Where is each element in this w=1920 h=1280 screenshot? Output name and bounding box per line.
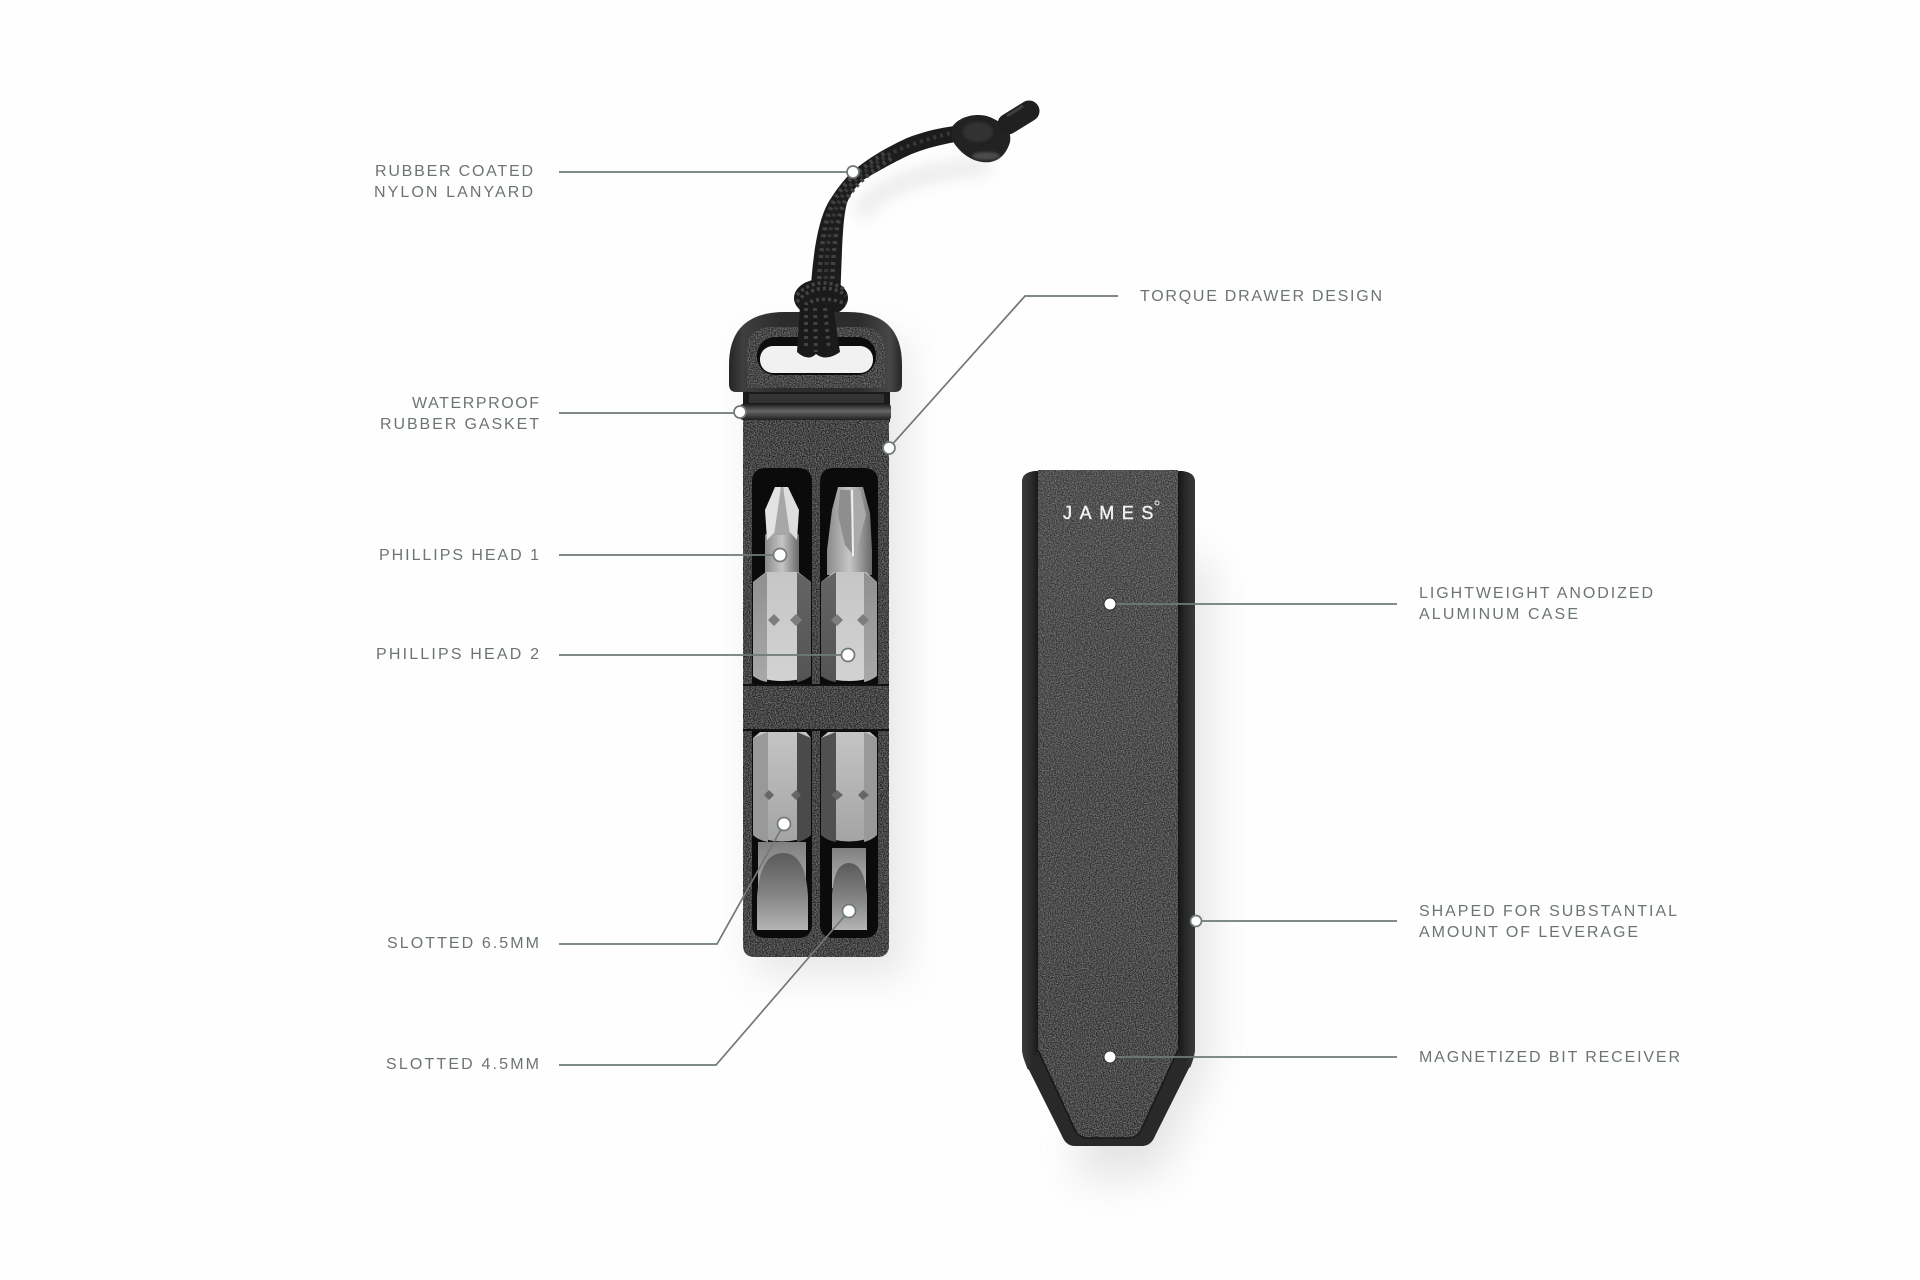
drawer shadow bbox=[755, 340, 905, 975]
callout: lightweight anodized aluminum case: LIGHTWEIGHT ANODIZED bbox=[1419, 585, 1653, 602]
callout: magnetized bit receiver bbox=[1104, 1049, 1680, 1066]
bit: slotted 6.5mm bbox=[753, 732, 811, 930]
callout: waterproof rubber gasket: WATERPROOF bbox=[412, 395, 539, 412]
callout: shaped for substantial amount of leverage bbox=[1190, 903, 1677, 941]
callout: magnetized bit receiver: MAGNETIZED BIT RECEIVER bbox=[1419, 1049, 1680, 1066]
knot bbox=[794, 279, 848, 317]
callout: lightweight anodized aluminum case: ALUMINUM CASE bbox=[1419, 606, 1578, 623]
rubber gasket bbox=[743, 392, 890, 422]
drawer cap bbox=[729, 312, 902, 392]
logo: JAMES: JAMES bbox=[1063, 503, 1161, 523]
bit: slotted 4.5mm bbox=[821, 732, 877, 930]
callout: torque drawer design: TORQUE DRAWER DESIGN bbox=[1140, 288, 1382, 305]
callout: slotted 6.5mm: SLOTTED 6.5MM bbox=[387, 935, 539, 952]
callout: slotted 6.5mm bbox=[387, 818, 790, 952]
callout: phillips head 2 bbox=[376, 646, 854, 663]
bit: phillips head 2 bbox=[821, 487, 877, 682]
callout: phillips head 1: PHILLIPS HEAD 1 bbox=[379, 547, 539, 564]
callout: rubber coated nylon lanyard: NYLON LANYARD bbox=[374, 184, 533, 201]
product: torque drawer bbox=[729, 106, 1029, 975]
callout: torque drawer design bbox=[883, 288, 1382, 454]
callout: slotted 4.5mm bbox=[386, 904, 856, 1073]
case shadow bbox=[1075, 560, 1210, 1180]
lanyard tip bbox=[1008, 111, 1029, 124]
lanyard cord bbox=[794, 106, 1029, 317]
logo degree mark bbox=[1155, 501, 1159, 505]
drawer body bbox=[743, 420, 889, 957]
callout: waterproof rubber gasket bbox=[380, 395, 746, 433]
middle bar bbox=[743, 686, 889, 730]
bead bbox=[952, 115, 1010, 162]
lanyard through slot bbox=[797, 305, 840, 358]
callout: rubber coated nylon lanyard: RUBBER COATED bbox=[375, 163, 533, 180]
callout: lightweight anodized aluminum case bbox=[1104, 585, 1653, 623]
case outer body bbox=[1022, 471, 1195, 1146]
lanyard shadow bbox=[860, 165, 990, 215]
callout: phillips head 1 bbox=[379, 547, 786, 564]
callout: phillips head 2: PHILLIPS HEAD 2 bbox=[376, 646, 539, 663]
bit: phillips head 1 bbox=[753, 487, 811, 682]
callout: shaped for substantial amount of leverage: AMOUNT OF LEVERAGE bbox=[1419, 924, 1638, 941]
callout: rubber coated nylon lanyard bbox=[374, 163, 859, 201]
drawer lower windows bbox=[752, 730, 812, 938]
drawer top windows bbox=[752, 468, 812, 685]
callout: shaped for substantial amount of leverage: SHAPED FOR SUBSTANTIAL bbox=[1419, 903, 1677, 920]
callout: slotted 4.5mm: SLOTTED 4.5MM bbox=[386, 1056, 539, 1073]
product: aluminum case bbox=[1022, 470, 1210, 1180]
case face bbox=[1038, 470, 1178, 1138]
callout: waterproof rubber gasket: RUBBER GASKET bbox=[380, 416, 539, 433]
